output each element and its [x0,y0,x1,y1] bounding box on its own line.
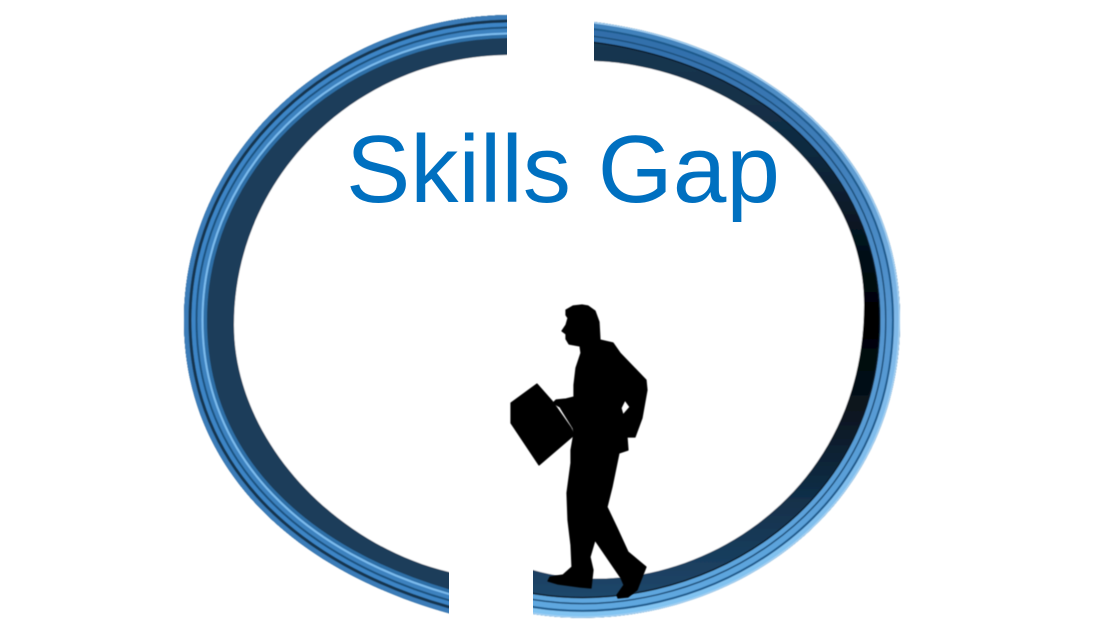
man's body [548,305,647,598]
briefcase [511,384,574,465]
icon: silhouette of businessman walking with briefcase [511,305,647,598]
title: Skills Gap: Skills Gap [346,116,780,223]
left arc of ring [183,14,507,614]
right arc of ring [500,18,900,618]
infographic canvas [183,14,901,619]
